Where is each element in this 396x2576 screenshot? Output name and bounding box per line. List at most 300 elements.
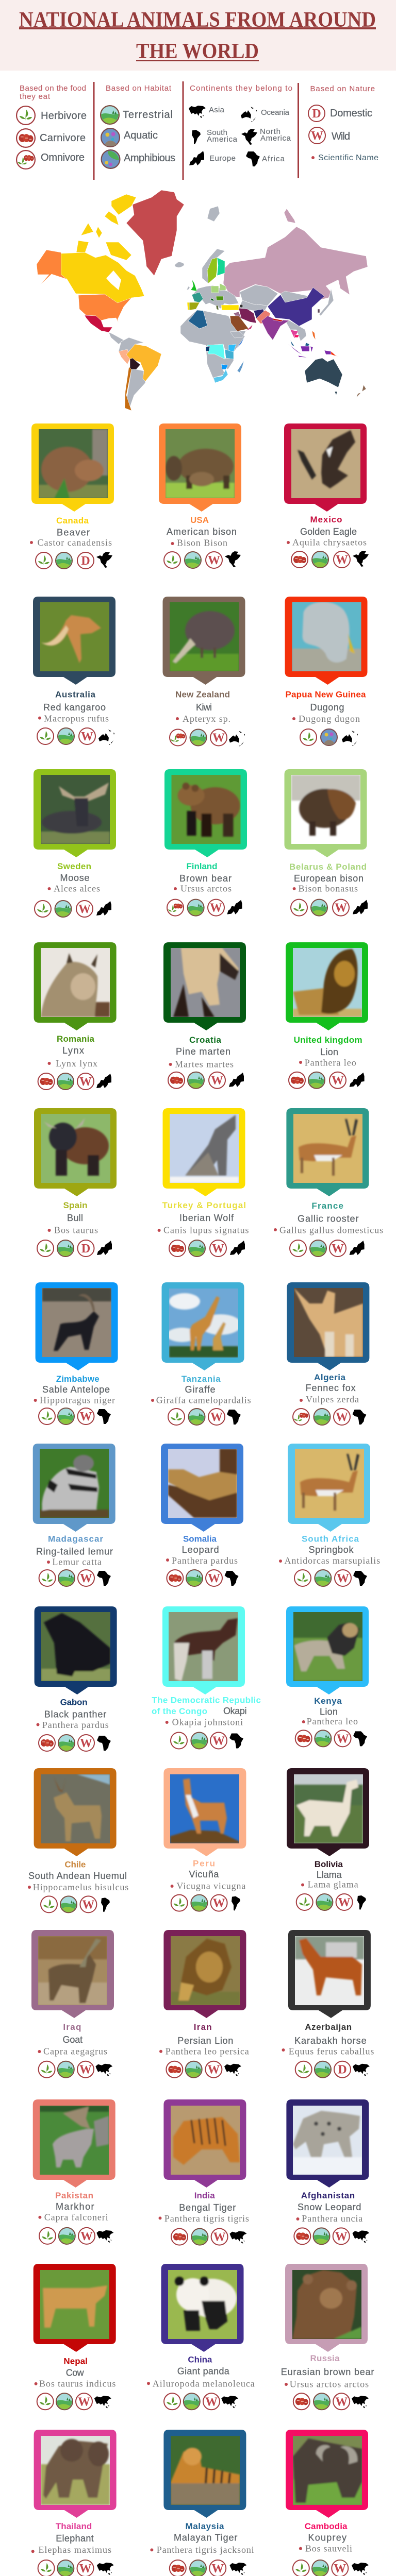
trait icons: W <box>211 1074 223 1088</box>
world map <box>37 190 368 411</box>
card: Cambodia <box>286 2430 369 2576</box>
card: Somalia <box>161 1444 243 1586</box>
animal: Giraffe <box>185 1384 216 1395</box>
frame <box>34 1768 117 1856</box>
card: Malaysia <box>150 2430 254 2576</box>
trait icons <box>171 1895 240 1911</box>
animal: Markhor <box>56 2201 94 2212</box>
card: Kenya <box>286 1606 369 1747</box>
scientific name: Ursus arctos <box>180 884 232 894</box>
frame <box>163 1930 246 2018</box>
legend: continents: North <box>260 127 280 136</box>
scientific name: Bos taurus <box>54 1225 98 1235</box>
frame <box>164 769 247 857</box>
country: Thailand <box>56 2521 92 2531</box>
card: USA <box>159 423 241 568</box>
trait icons <box>291 551 369 568</box>
trait icons <box>293 2560 369 2576</box>
country: Algeria <box>314 1372 346 1382</box>
card: New Zealand <box>163 597 245 746</box>
legend: continents: America <box>260 134 291 143</box>
card: United kingdom <box>286 942 368 1089</box>
animal: Sable Antelope <box>42 1384 110 1395</box>
trait icons: W <box>79 2562 92 2575</box>
photo: okapi <box>169 1612 238 1681</box>
trait icons <box>38 1073 111 1090</box>
photo: sable antelope <box>42 1288 111 1357</box>
scientific name: Hippotragus niger <box>40 1395 115 1405</box>
animal: Gallic rooster <box>298 1214 359 1224</box>
frame <box>161 1444 243 1532</box>
legend: continents: America <box>207 135 238 144</box>
legend: habitat: Amphibious <box>124 152 175 164</box>
scientific name: Bison Bison <box>177 538 227 548</box>
card: The Democratic Republic of the Congo <box>152 1606 261 1749</box>
frame <box>162 1606 245 1694</box>
country: Finland <box>187 861 218 871</box>
country: Pakistan <box>55 2191 93 2200</box>
legend: nature: Scientific Name <box>318 154 378 162</box>
frame <box>34 769 116 857</box>
country: Afghanistan <box>301 2191 355 2200</box>
trait icons: W <box>335 2230 348 2243</box>
country: Spain <box>63 1200 88 1210</box>
scientific name: Giraffa camelopardalis <box>156 1395 251 1405</box>
scientific name: Panthera pardus <box>42 1720 109 1730</box>
photo: bull <box>41 1114 110 1183</box>
animal: Springbok <box>308 1545 354 1555</box>
scientific name: Aquila chrysaetos <box>292 537 367 547</box>
frame <box>31 1930 114 2018</box>
trait icons: W <box>78 2395 90 2409</box>
photo: lion <box>293 1612 362 1681</box>
photo: bengal tiger <box>171 2106 240 2175</box>
animal: Red kangaroo <box>43 702 106 713</box>
card: Afghanistan <box>286 2099 369 2244</box>
scientific name: Macropus rufus <box>44 713 109 723</box>
animal: Fennec fox <box>306 1383 356 1393</box>
country: Madagascar <box>48 1534 103 1544</box>
card: Peru <box>163 1768 246 1911</box>
animal: Bengal Tiger <box>179 2202 236 2213</box>
scientific name: Elephas maximus <box>38 2545 111 2555</box>
photo: goat <box>38 1936 107 2005</box>
legend: continents: Oceania <box>261 108 290 117</box>
card: Iraq <box>31 1930 114 2078</box>
trait icons <box>167 900 242 916</box>
scientific name: Gallus gallus domesticus <box>279 1225 383 1235</box>
legend: habitat: Aquatic <box>124 130 158 141</box>
scientific name: Dugong dugon <box>299 714 360 724</box>
animal: American bison <box>167 527 237 537</box>
card: Thailand <box>31 2430 117 2576</box>
country: Malaysia <box>186 2521 224 2531</box>
country: Zimbabwe <box>56 1374 100 1384</box>
photo: brown bear <box>171 775 240 844</box>
scientific name: Hippocamelus bisulcus <box>33 1882 128 1892</box>
photo: iberian wolf <box>170 1114 239 1183</box>
frame <box>33 2099 116 2188</box>
animal: Bull <box>67 1213 83 1223</box>
frame <box>287 1282 369 1370</box>
card: Spain <box>34 1108 117 1257</box>
card: Pakistan <box>33 2099 116 2244</box>
scientific name: Bos sauveli <box>305 2543 352 2553</box>
trait icons: W <box>79 2063 92 2077</box>
photo: springbok <box>293 1114 362 1183</box>
animal: Llama <box>317 1870 342 1880</box>
country: The Democratic Republic <box>152 1695 261 1705</box>
frame <box>286 942 368 1030</box>
trait icons <box>39 1570 111 1586</box>
scientific name: Vicugna vicugna <box>176 1881 245 1891</box>
trait icons <box>39 2228 113 2244</box>
frame <box>287 1768 369 1856</box>
legend: nature: D <box>312 107 321 121</box>
title band <box>0 0 396 71</box>
card: Nepal <box>34 2264 116 2410</box>
trait icons: W <box>207 2063 220 2077</box>
frame <box>34 2430 117 2518</box>
country: Croatia <box>189 1035 222 1045</box>
photo: vicuna <box>170 1774 239 1843</box>
trait icons: W <box>212 1242 224 1256</box>
scientific name: Capra aegagrus <box>43 2046 107 2056</box>
country: Mexico <box>310 515 342 524</box>
scientific name: Lama glama <box>308 1879 358 1890</box>
legend <box>16 81 378 180</box>
animal: Eurasian brown bear <box>281 2367 374 2377</box>
trait icons: W <box>213 1897 225 1910</box>
trait icons: W <box>80 1572 92 1585</box>
card: Madagascar <box>33 1444 116 1586</box>
trait icons: W <box>336 1411 348 1424</box>
trait icons: W <box>337 1572 349 1585</box>
trait icons: W <box>208 1572 220 1585</box>
photo: malayan tiger <box>171 2436 240 2505</box>
photo: leopard <box>168 1449 237 1518</box>
photo: persian lion <box>171 1936 240 2005</box>
trait icons <box>39 1408 111 1425</box>
trait icons <box>294 2228 369 2244</box>
legend: food: Based on the food <box>20 84 86 93</box>
card: Turkey & Portugal <box>158 1108 249 1257</box>
animal: Lion <box>320 1706 338 1717</box>
animal: South Andean Huemul <box>28 1871 127 1881</box>
trait icons: W <box>80 2230 93 2243</box>
trait icons <box>38 2560 114 2576</box>
frame <box>286 1108 369 1196</box>
card: Croatia <box>163 942 246 1089</box>
card: Zimbabwe <box>34 1282 118 1425</box>
frame <box>288 1930 371 2018</box>
trait icons <box>293 1409 366 1425</box>
frame <box>163 1108 245 1196</box>
card: Papua New Guinea <box>285 597 367 746</box>
frame <box>35 1606 117 1694</box>
card: Gabon <box>35 1606 117 1751</box>
trait icons: W <box>208 554 220 567</box>
country: Belarus & Poland <box>289 862 367 872</box>
trait icons: D <box>338 2063 347 2077</box>
card: Sweden <box>34 769 116 917</box>
photo: pine marten <box>171 948 240 1017</box>
legend: habitat: Terrestrial <box>123 109 173 121</box>
frame <box>285 769 367 857</box>
animal: Golden Eagle <box>300 527 357 537</box>
card: Belarus & Poland <box>285 769 368 916</box>
scientific name: Capra falconeri <box>44 2212 108 2222</box>
frame <box>31 423 114 512</box>
scientific name: Panthera uncia <box>302 2213 362 2224</box>
trait icons: W <box>79 1410 92 1423</box>
photo: giant panda <box>168 2270 237 2339</box>
trait icons <box>295 2061 370 2078</box>
scientific name: Panthera tigris tigris <box>164 2213 249 2224</box>
card: Canada <box>30 423 114 569</box>
country: Tanzania <box>182 1374 221 1384</box>
frame <box>288 1444 370 1532</box>
trait icons <box>294 1570 367 1586</box>
country: Peru <box>193 1858 215 1868</box>
scientific name: Bison bonasus <box>298 884 358 894</box>
animal: Kouprey <box>308 2533 346 2543</box>
frame <box>163 2430 246 2518</box>
trait icons <box>170 2560 246 2576</box>
country: Iran <box>194 2022 212 2032</box>
trait icons <box>39 2061 112 2078</box>
trait icons <box>164 551 241 568</box>
frame <box>33 597 116 685</box>
trait icons <box>295 1730 367 1747</box>
photo: kouprey <box>293 2436 362 2505</box>
country: Gabon <box>60 1698 88 1707</box>
animal: Okapi <box>223 1706 246 1716</box>
card: Romania <box>34 942 117 1090</box>
animal: Leopard <box>182 1545 219 1555</box>
trait icons <box>290 1240 365 1257</box>
scientific name: Antidorcas marsupialis <box>285 1555 380 1566</box>
legend: continents <box>189 84 292 166</box>
trait icons: W <box>335 902 347 915</box>
animal: Black panther <box>44 1709 106 1720</box>
trait icons: W <box>213 2231 226 2244</box>
trait icons <box>37 2393 111 2410</box>
country: Romania <box>57 1034 95 1044</box>
country: Kenya <box>314 1696 342 1706</box>
photo: lynx <box>41 948 110 1017</box>
card: Chile <box>28 1768 128 1912</box>
trait icons: W <box>79 1075 92 1089</box>
photo: elephant <box>41 2436 110 2505</box>
frame <box>286 1606 369 1694</box>
country: Canada <box>56 516 89 526</box>
legend: food: Carnivore <box>40 132 86 144</box>
animal: European bison <box>294 873 364 884</box>
title line 2: THE WORLD <box>136 40 259 63</box>
scientific name: Ursus arctos arctos <box>290 2379 369 2389</box>
frame <box>285 2264 368 2352</box>
photo: springbok <box>295 1449 364 1518</box>
trait icons: W <box>211 2562 224 2575</box>
animal: Moose <box>60 873 90 883</box>
trait icons <box>39 1735 111 1751</box>
photo: south andean huemul <box>41 1774 110 1843</box>
photo: ring-tailed lemur <box>40 1449 109 1518</box>
trait icons: W <box>82 1898 94 1911</box>
photo: eurasian brown bear <box>292 2270 361 2339</box>
frame <box>286 2430 368 2518</box>
legend: habitat: Based on Habitat <box>106 84 172 93</box>
trait icons <box>300 729 358 746</box>
legend: continents: Asia <box>209 106 225 114</box>
animal: Karabakh horse <box>294 2036 367 2046</box>
photo: llama <box>294 1774 363 1843</box>
scientific name: Canis lupus signatus <box>163 1225 249 1235</box>
legend: nature: Domestic <box>330 108 372 119</box>
scientific name: Equus ferus caballus <box>289 2046 374 2056</box>
trait icons <box>166 2061 241 2078</box>
card: France <box>274 1108 383 1257</box>
card: China <box>147 2264 255 2410</box>
photo: karabakh horse <box>295 1936 364 2005</box>
frame <box>163 1768 246 1856</box>
scientific name: Bos taurus indicus <box>39 2379 116 2389</box>
frame <box>163 2099 246 2188</box>
frame <box>163 942 246 1030</box>
animal: Dugong <box>310 702 344 713</box>
card: Bolivia <box>287 1768 369 1910</box>
scientific name: Ailuropoda melanoleuca <box>153 2379 255 2389</box>
frame <box>36 1282 118 1370</box>
trait icons <box>171 2229 246 2245</box>
animal: Giant panda <box>177 2366 230 2376</box>
trait icons: W <box>210 902 222 915</box>
trait icons <box>293 2393 369 2410</box>
frame <box>161 2264 243 2352</box>
scientific name: Vulpes zerda <box>306 1394 359 1404</box>
country: Azerbaijan <box>305 2022 352 2032</box>
card: India <box>159 2099 249 2245</box>
country: Somalia <box>183 1534 217 1544</box>
legend: habitat <box>101 84 175 168</box>
legend: food <box>16 84 87 169</box>
card: Algeria <box>287 1282 369 1425</box>
trait icons: W <box>338 1896 351 1909</box>
legend: food: Omnivore <box>41 152 85 163</box>
scientific name: Martes martes <box>175 1059 234 1070</box>
trait icons: W <box>80 1737 92 1750</box>
photo: lion <box>293 948 362 1017</box>
trait icons <box>167 1570 239 1586</box>
card: Finland <box>164 769 247 916</box>
trait icons <box>169 1240 245 1257</box>
animal: Elephant <box>56 2533 94 2544</box>
legend: food: Herbivore <box>41 110 87 122</box>
card: Iran <box>159 1930 249 2078</box>
country: Nepal <box>63 2356 88 2366</box>
photo: kiwi <box>170 602 239 671</box>
country: Papua New Guinea <box>286 689 366 700</box>
animal: Kiwi <box>196 702 212 713</box>
photo: snow leopard <box>293 2106 362 2175</box>
legend: nature: Wild <box>332 131 350 142</box>
trait icons: W <box>212 732 225 745</box>
photo: markhor <box>40 2106 109 2175</box>
country: Cambodia <box>305 2521 348 2531</box>
scientific name: Okapia johnstoni <box>172 1717 243 1727</box>
frame <box>284 423 367 512</box>
frame <box>34 2264 116 2352</box>
card: Tanzania <box>151 1282 251 1425</box>
trait icons <box>37 728 114 745</box>
frame <box>34 942 117 1030</box>
legend: continents: Continents they belong to <box>190 84 292 93</box>
scientific name: Panthera tigris jacksoni <box>157 2545 254 2555</box>
trait icons <box>291 900 368 916</box>
photo: fennec fox <box>294 1288 363 1357</box>
animal: Persian Lion <box>177 2036 233 2046</box>
trait icons: D <box>81 554 90 568</box>
frame <box>163 597 245 685</box>
frame <box>285 597 367 685</box>
scientific name: Panthera leo persica <box>166 2046 249 2056</box>
legend: nature <box>308 84 378 162</box>
country: France <box>311 1201 343 1211</box>
country: USA <box>190 515 209 525</box>
scientific name: Panthera leo <box>307 1716 358 1726</box>
trait icons <box>41 1896 110 1912</box>
animal: Goat <box>63 2035 82 2045</box>
photo: bison <box>166 429 235 498</box>
photo: cow <box>40 2270 109 2339</box>
card: Australia <box>33 597 116 745</box>
animal: Iberian Wolf <box>179 1213 234 1223</box>
photo: european bison <box>291 775 360 844</box>
animal: Lion <box>320 1047 338 1057</box>
trait icons <box>171 1732 243 1749</box>
trait icons <box>36 552 112 569</box>
frame <box>34 1108 117 1196</box>
country: United kingdom <box>294 1035 362 1045</box>
country: New Zealand <box>175 689 230 700</box>
legend: continents: Africa <box>262 155 285 163</box>
animal: Cow <box>66 2367 85 2378</box>
scientific name: Apteryx sp. <box>183 714 230 724</box>
scientific name: Panthera pardus <box>172 1555 238 1566</box>
country: India <box>194 2191 215 2200</box>
animal: Brown bear <box>179 873 232 884</box>
card: Russia <box>281 2264 374 2410</box>
country: Russia <box>310 2353 340 2363</box>
photo: golden eagle <box>291 429 360 498</box>
country line 2: of the Congo <box>152 1706 207 1716</box>
country: Australia <box>55 689 96 700</box>
country: Chile <box>64 1860 86 1870</box>
animal: Vicuña <box>189 1869 219 1879</box>
trait icons: W <box>334 2562 346 2575</box>
scientific name: Lemur catta <box>52 1557 102 1567</box>
scientific name: Alces alces <box>54 884 100 894</box>
trait icons: W <box>78 903 91 916</box>
animal: Malayan Tiger <box>174 2533 237 2543</box>
card: South Africa <box>279 1444 380 1586</box>
trait icons <box>168 1409 241 1425</box>
photo: moose <box>41 775 110 844</box>
frame <box>33 1444 116 1532</box>
legend: continents: Europe <box>209 154 236 163</box>
photo: dugong <box>292 602 361 671</box>
